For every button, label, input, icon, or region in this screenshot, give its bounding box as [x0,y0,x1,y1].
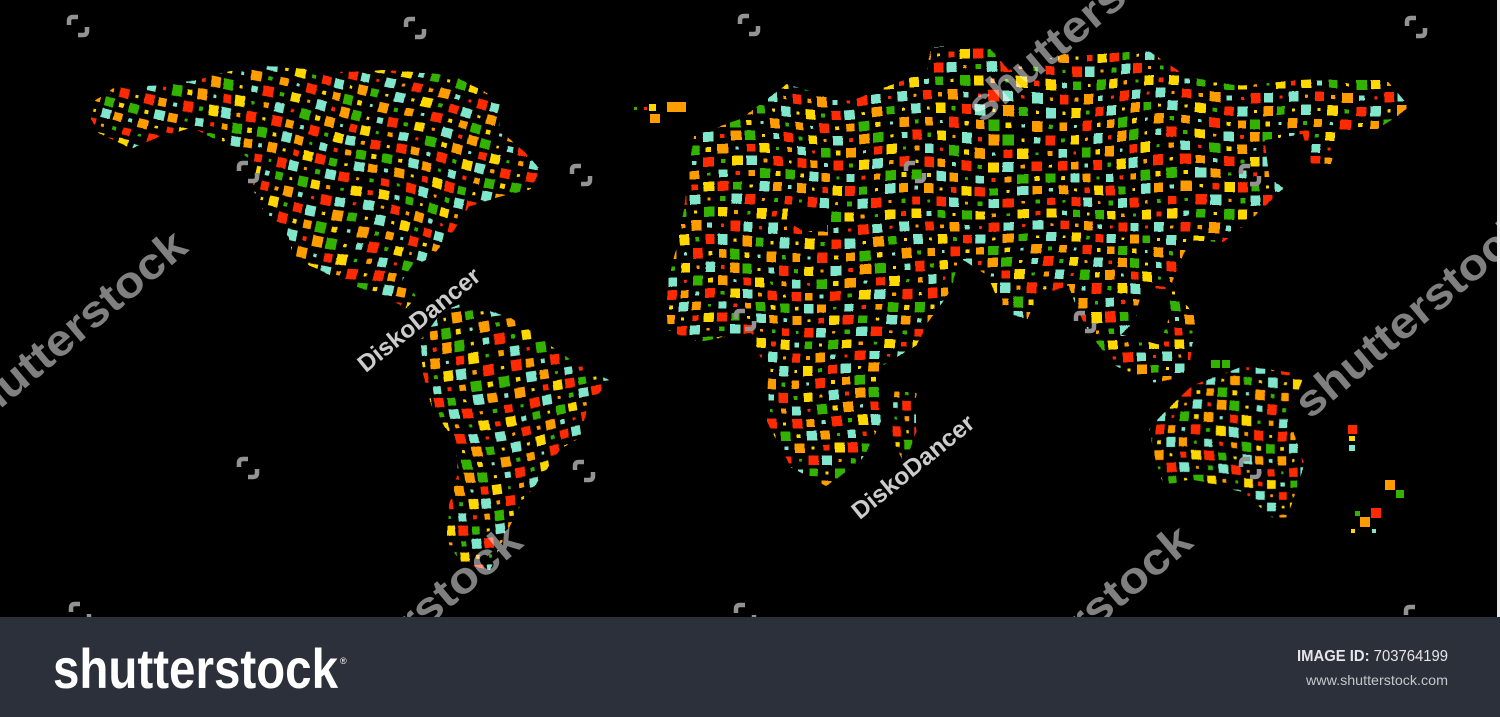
watermark: DiskoDancer left: DiskoDancer [352,262,486,378]
watermark: shutterstock bottom middle: erstock [366,515,532,665]
continent: South America [420,305,612,565]
watermark: corner icons [69,16,1425,625]
continent: Eurasia and Africa [662,50,1405,488]
watermark: shutterstock bottom right: erstock [1036,515,1202,665]
continent: North America [90,68,540,312]
image id: IMAGE ID: 703764199 [1297,648,1448,665]
small islands [634,102,1404,533]
right edge line [1497,0,1500,617]
continent: Australia [1150,370,1305,515]
registered mark: ® [340,656,347,666]
island: New Guinea tip [1211,360,1230,368]
island: Iceland [634,102,686,123]
island: Pacific dots [1348,425,1357,451]
islands: New Zealand [1351,480,1404,533]
sea: gulf gap in South East Asia [1120,290,1170,345]
watermark: DiskoDancer right: DiskoDancer [846,409,980,525]
sea: Mediterranean gap [787,208,830,229]
world map of coloured squares [90,50,1405,565]
island: Madagascar [893,395,920,462]
footer logo: shutterstock [53,637,339,700]
footer bar [0,617,1500,717]
website url: www.shutterstock.com [1305,672,1448,688]
